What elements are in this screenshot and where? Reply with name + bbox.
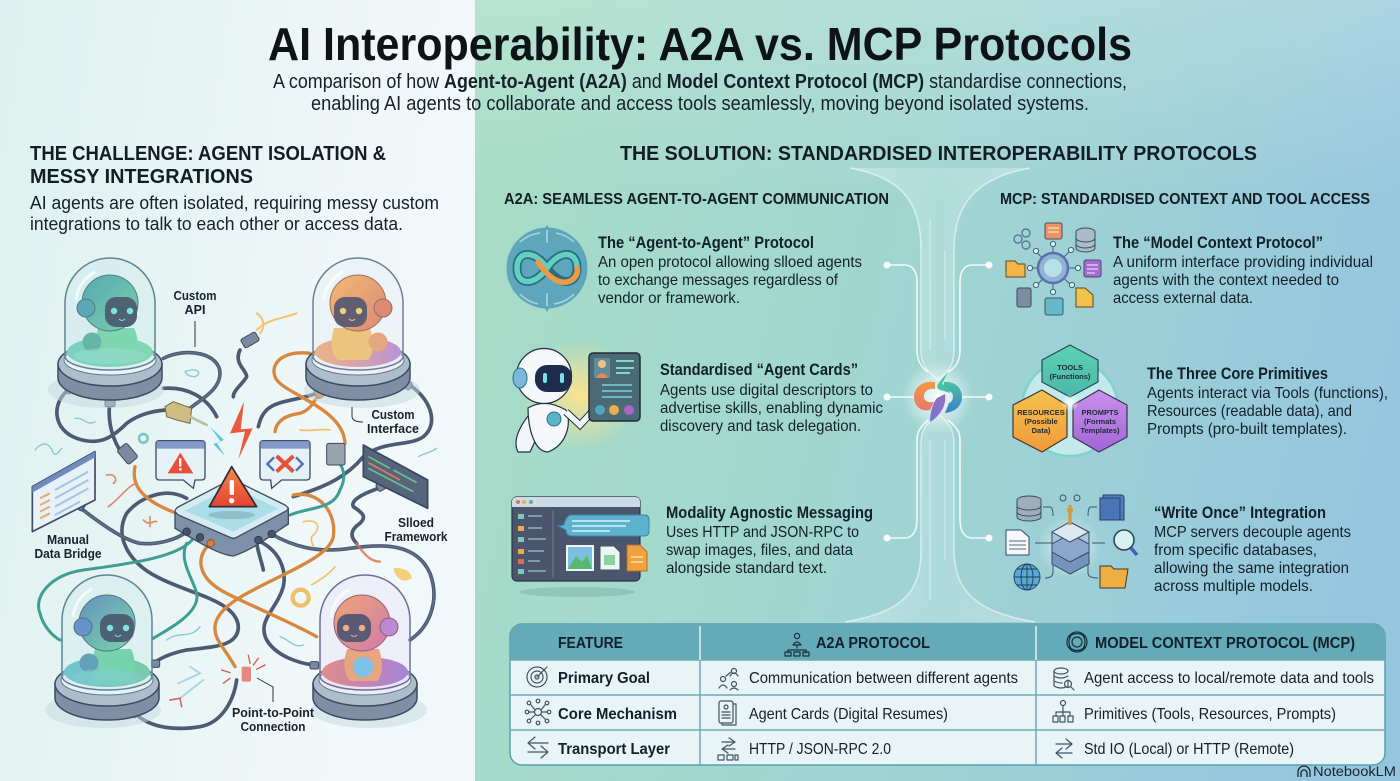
row: transport layer: Std IO (Local) or HTTP (Remote) (1084, 741, 1294, 758)
heading: the challenge: MESSY INTEGRATIONS (30, 166, 253, 188)
robot: bottom left agent in glass dome (45, 575, 161, 728)
label: manual data bridge (34, 533, 102, 561)
table header row (510, 624, 1385, 660)
table header row: FEATURE (558, 635, 623, 652)
hexagon: resources: (Possible (1024, 417, 1058, 426)
notebooklm logo: NotebookLM (1313, 764, 1396, 779)
mcp item: model context protocol: A uniform interface providing individual (1113, 254, 1373, 271)
text: challenge description (30, 193, 439, 234)
a2a item: modality agnostic messaging: alongside standard text. (666, 560, 827, 577)
broken link (178, 667, 203, 698)
a2a item: modality agnostic messaging (666, 504, 873, 577)
mcp item: three core primitives: Prompts (pro-built templates). (1147, 421, 1347, 438)
label: siloed framework: Slloed (398, 516, 434, 530)
mcp item: write once integration: MCP servers decouple agents (1154, 524, 1351, 541)
hexagon: resources (1013, 390, 1067, 452)
gear (293, 590, 309, 606)
left panel background (0, 0, 475, 781)
tape knot (165, 402, 192, 423)
icon: robot presenting agent card (513, 340, 642, 452)
row: primary goal: Communication between different agents (749, 670, 1018, 687)
a2a item: agent-to-agent protocol: vendor or framework. (598, 290, 740, 307)
row: transport layer (528, 737, 1294, 760)
row: core mechanism: Agent Cards (Digital Resumes) (749, 706, 948, 723)
mcp item: model context protocol: access external data. (1113, 290, 1253, 307)
central channel between protocols (845, 168, 1035, 622)
icon: a2a header (785, 633, 809, 656)
heading: a2a column: A2A: SEAMLESS AGENT-TO-AGENT COMMUNICATION (504, 191, 889, 208)
hexagon: tools (1042, 345, 1098, 397)
connector lines to the central hub (884, 262, 992, 542)
robot: top left agent in glass dome (48, 258, 164, 408)
row: primary goal (527, 667, 1374, 690)
row: transport layer: Transport Layer (558, 741, 670, 758)
title: AI Interoperability: A2A vs. MCP Protocols (268, 18, 1132, 70)
row: core mechanism: Primitives (Tools, Resources, Prompts) (1084, 706, 1336, 723)
label: custom interface: Interface (367, 422, 419, 436)
hexagon: prompts: PROMPTS (1081, 408, 1119, 417)
hexagon: prompts (1073, 390, 1127, 452)
row: core mechanism: Core Mechanism (558, 706, 677, 723)
table header row: A2A PROTOCOL (816, 635, 930, 652)
mcp item: write once integration (1154, 504, 1351, 595)
mcp item: three core primitives: Agents interact via Tools (functions), (1147, 385, 1388, 402)
icon: central sync hub (902, 361, 974, 433)
mcp item: model context protocol: The “Model Context Protocol” (1113, 234, 1323, 252)
label: siloed framework (384, 516, 448, 544)
row: primary goal: Agent access to local/remote data and tools (1084, 670, 1374, 687)
a2a item: agent cards: advertise skills, enabling dynamic (660, 400, 883, 417)
plugs (63, 332, 413, 718)
icon: conflict message window (260, 441, 310, 488)
hexagon: prompts: (Formats (1084, 417, 1116, 426)
label: siloed framework: Framework (384, 530, 448, 544)
mcp item: three core primitives (1147, 365, 1388, 438)
icon: siloed framework screen (363, 445, 428, 508)
label: point-to-point connection: Point-to-Point (232, 706, 315, 720)
text: challenge description: AI agents are often isolated, requiring messy custom (30, 193, 439, 213)
label: custom api (174, 289, 216, 347)
a2a item: agent-to-agent protocol: to exchange messages regardless of (598, 272, 839, 289)
hexagon: resources: RESOURCES (1017, 408, 1065, 417)
mcp item: write once integration: across multiple models. (1154, 578, 1313, 595)
icon: model context hub with data items (1006, 223, 1101, 315)
robot: top right agent in glass dome (304, 258, 420, 408)
label: point-to-point connection: Connection (240, 720, 306, 734)
mcp item: write once integration: from specific databases, (1154, 542, 1317, 559)
icon: messaging application window (512, 497, 649, 597)
robot: bottom right agent in glass dome (311, 575, 427, 728)
a2a item: agent-to-agent protocol (598, 234, 862, 307)
text: challenge description: integrations to talk to each other or access data. (30, 214, 403, 234)
a2a item: modality agnostic messaging: Modality Agnostic Messaging (666, 504, 873, 522)
lightning (210, 427, 225, 456)
a2a item: agent cards: discovery and task delegation. (660, 418, 861, 435)
a2a item: modality agnostic messaging: Uses HTTP and JSON-RPC to (666, 524, 859, 541)
icon: mcp header (1067, 632, 1087, 652)
comparison table (510, 624, 1385, 765)
mcp item: write once integration: “Write Once” Integration (1154, 504, 1326, 522)
icon: manual data bridge window (32, 452, 95, 532)
icon: three core primitives hexagons (1013, 345, 1127, 456)
mcp item: model context protocol: agents with the context needed to (1113, 272, 1339, 289)
row: transport layer: HTTP / JSON-RPC 2.0 (749, 741, 891, 758)
doodles (35, 370, 437, 646)
row: primary goal: Primary Goal (558, 670, 650, 687)
icon: agent-to-agent infinity loop (506, 225, 588, 312)
label: manual data bridge: Data Bridge (34, 547, 102, 561)
hexagon: tools: (Functions) (1050, 372, 1091, 381)
cables (35, 313, 437, 728)
subtitle (273, 71, 1127, 115)
heading: the challenge: THE CHALLENGE: AGENT ISOLATION & (30, 143, 386, 165)
icon: warning message window (156, 441, 205, 488)
mcp item: three core primitives: The Three Core Primitives (1147, 365, 1328, 383)
subtitle: enabling AI agents to collaborate and access tools seamlessly, moving beyond isolated systems. (311, 93, 1089, 115)
label: custom interface: Custom (372, 408, 414, 422)
a2a item: agent cards (660, 361, 883, 435)
right panel background (475, 0, 1400, 781)
hexagon: resources: Data) (1032, 426, 1051, 435)
a2a item: agent cards: Standardised “Agent Cards” (660, 361, 858, 379)
icon: write-once server with connected sources (1006, 495, 1137, 590)
label: custom api: Custom (174, 289, 216, 303)
a2a item: agent-to-agent protocol: The “Agent-to-Agent” Protocol (598, 234, 814, 252)
icon: central switch with warning (175, 467, 288, 556)
table header row: MODEL CONTEXT PROTOCOL (MCP) (1095, 635, 1355, 652)
a2a item: agent cards: Agents use digital descriptors to (660, 382, 873, 399)
heading: the solution: THE SOLUTION: STANDARDISED INTEROPERABILITY PROTOCOLS (620, 143, 1257, 165)
subtitle: A comparison of how Agent-to-Agent (A2A) and Model Context Protocol (MCP) standardise connections, (273, 71, 1127, 93)
label: point-to-point connection (232, 678, 315, 734)
a2a item: modality agnostic messaging: swap images, files, and data (666, 542, 853, 559)
a2a item: agent-to-agent protocol: An open protocol allowing slloed agents (598, 254, 862, 271)
heading: the challenge (30, 143, 386, 188)
row: core mechanism (525, 699, 1336, 725)
mcp item: write once integration: allowing the same integration (1154, 560, 1349, 577)
diagram: tangled point-to-point integrations (32, 143, 1396, 779)
label: custom interface (352, 407, 419, 436)
hexagon: tools: TOOLS (1057, 363, 1083, 372)
label: custom api: API (184, 303, 206, 317)
hexagon: prompts: Templates) (1080, 426, 1120, 435)
heading: mcp column: MCP: STANDARDISED CONTEXT AND TOOL ACCESS (1000, 191, 1370, 208)
mcp item: model context protocol (1113, 234, 1373, 307)
label: manual data bridge: Manual (47, 533, 89, 547)
mcp item: three core primitives: Resources (readable data), and (1147, 403, 1352, 420)
